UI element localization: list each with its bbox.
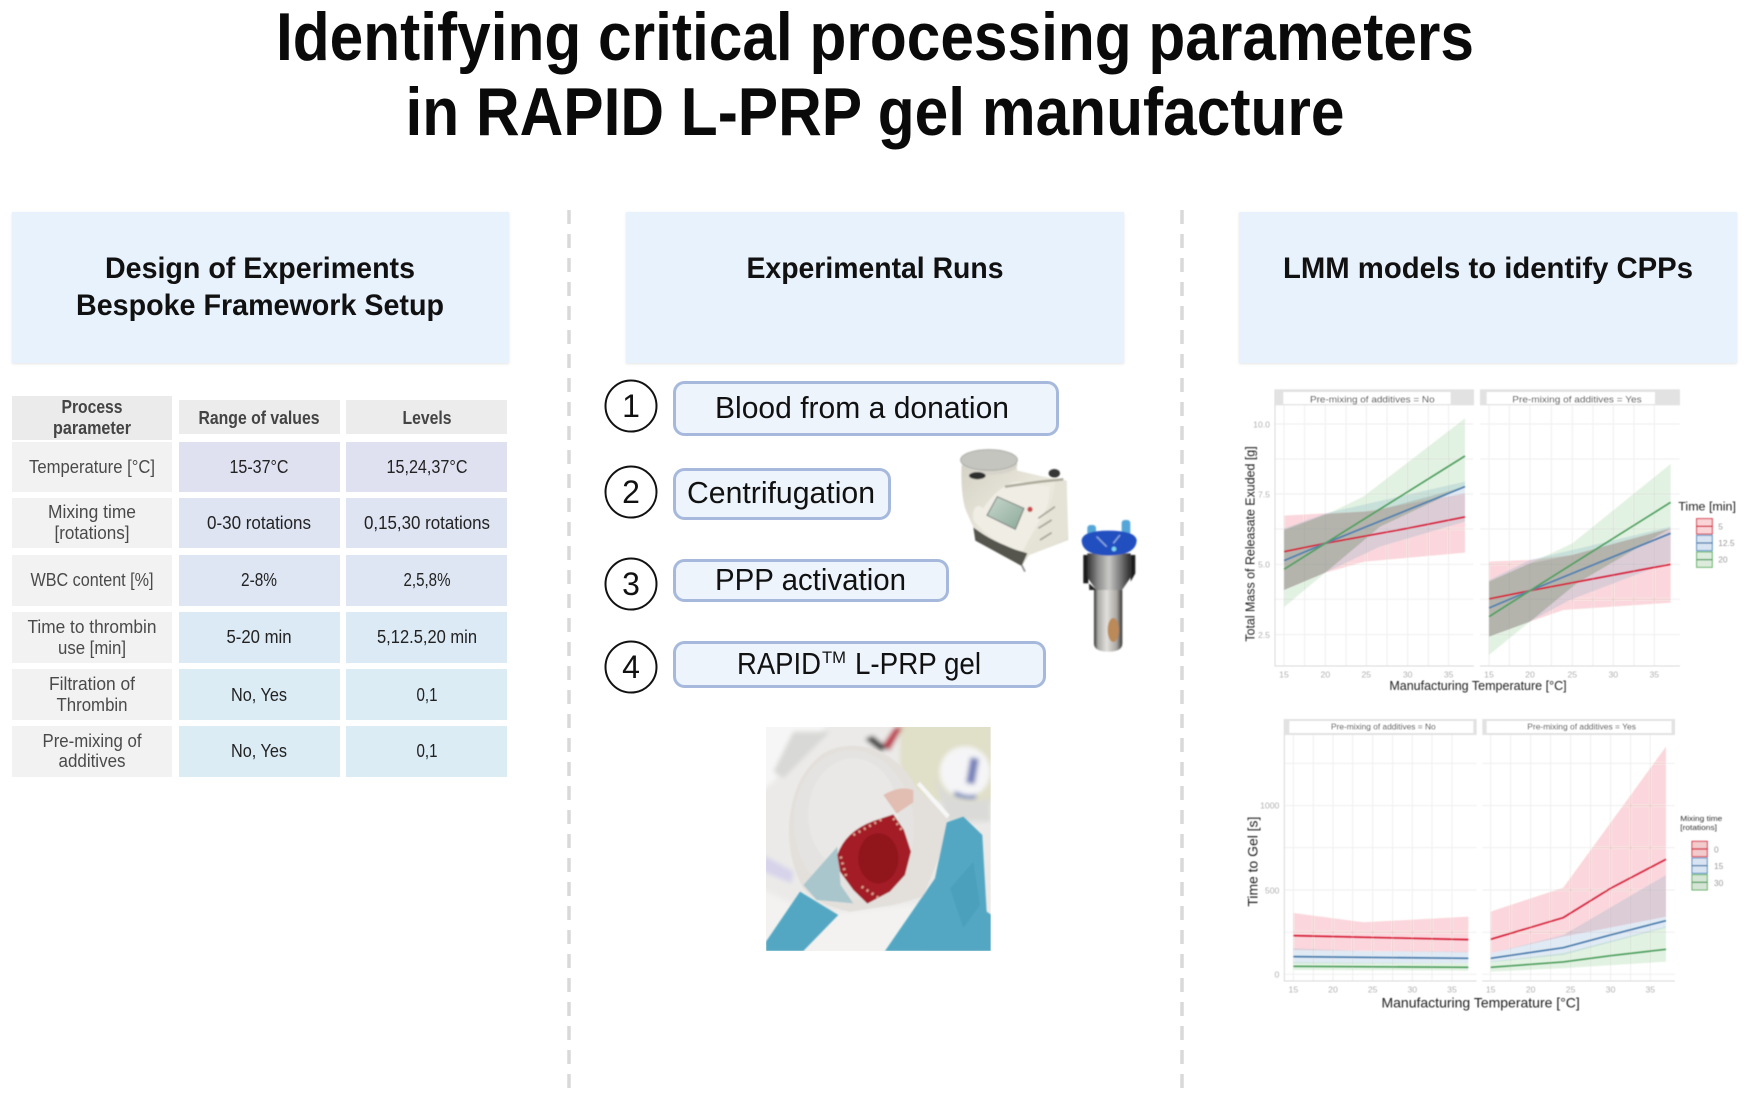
- table: process parameters: Mixing time: [48, 502, 136, 522]
- step 2: Centrifugation: [687, 475, 875, 510]
- table: process parameters: [rotations]: [54, 523, 130, 543]
- table: process parameters: [12, 396, 507, 777]
- table: process parameters: Filtration of: [49, 674, 136, 694]
- chart: total mass of releasate exuded: [1243, 389, 1736, 693]
- title: in RAPID L-PRP gel manufacture: [406, 74, 1344, 150]
- left facet: pre-mixing = No: Pre-mixing of additives = No: [1331, 721, 1436, 731]
- table: process parameters: Thrombin: [56, 695, 128, 715]
- table: process parameters: Time to thrombin: [28, 617, 156, 637]
- table: process parameters: 0,15,30 rotations: [364, 513, 490, 533]
- axis ticks: [1260, 801, 1655, 994]
- axis ticks: 20: [1328, 984, 1338, 994]
- axis ticks: 35: [1649, 670, 1659, 680]
- right facet: pre-mixing = Yes: [1480, 389, 1680, 655]
- table: process parameters: parameter: [53, 418, 131, 438]
- step 1: [606, 380, 1058, 434]
- table: process parameters: Levels: [402, 408, 452, 428]
- table: process parameters: 5-20 min: [226, 627, 292, 647]
- table: process parameters: Range of values: [198, 408, 320, 428]
- step 4: 4: [622, 649, 640, 685]
- icon: filter canister: [1082, 520, 1137, 652]
- axis ticks: 30: [1403, 670, 1413, 680]
- axis ticks: 5.0: [1258, 560, 1270, 570]
- axis titles: Total Mass of Releasate Exuded [g]: [1243, 446, 1257, 642]
- step 3: 3: [622, 566, 640, 602]
- table: process parameters: 2-8%: [241, 570, 277, 590]
- heading box: design of experiments: Design of Experiments: [105, 252, 415, 285]
- axis titles: Time to Gel [s]: [1244, 817, 1260, 907]
- left facet: pre-mixing = No: [1285, 719, 1477, 971]
- step 1: Blood from a donation: [715, 390, 1009, 425]
- axis ticks: 0: [1275, 970, 1280, 980]
- title: [276, 0, 1474, 150]
- axis titles: [1243, 446, 1567, 693]
- axis ticks: 15: [1484, 670, 1494, 680]
- step 4: L-PRP gel: [855, 646, 981, 681]
- table: process parameters: 2,5,8%: [404, 570, 450, 590]
- axis ticks: 35: [1444, 670, 1454, 680]
- legend: mixing time: Mixing time: [1680, 814, 1722, 823]
- table: process parameters: No, Yes: [231, 741, 287, 761]
- axis ticks: 25: [1361, 670, 1371, 680]
- axis ticks: 1000: [1260, 801, 1280, 811]
- axis ticks: 30: [1608, 670, 1618, 680]
- table: process parameters: Pre-mixing of: [42, 731, 142, 751]
- axis ticks: 25: [1566, 984, 1576, 994]
- table: process parameters: Process: [62, 397, 122, 417]
- table: process parameters: 0,1: [416, 685, 438, 705]
- axis ticks: 20: [1321, 670, 1330, 680]
- table: process parameters: 15,24,37°C: [386, 457, 468, 477]
- legend: mixing time: 0: [1714, 844, 1719, 854]
- right facet: pre-mixing = Yes: Pre-mixing of additives = Yes: [1527, 721, 1636, 731]
- step 4: [606, 642, 1044, 692]
- table: process parameters: Temperature [°C]: [29, 457, 155, 477]
- axis ticks: 35: [1645, 984, 1655, 994]
- axis ticks: 10.0: [1253, 419, 1270, 429]
- heading box: experimental runs: [626, 212, 1124, 363]
- chart: time to gel: [1244, 719, 1724, 1011]
- icon: centrifuge device: [961, 450, 1068, 572]
- step 4: RAPID: [737, 646, 821, 681]
- step 1: 1: [622, 388, 640, 424]
- axis ticks: 30: [1407, 984, 1417, 994]
- table: process parameters: use [min]: [58, 638, 126, 658]
- right facet: pre-mixing = Yes: [1482, 719, 1675, 972]
- axis ticks: 35: [1447, 984, 1457, 994]
- title: Identifying critical processing parameters: [276, 0, 1474, 75]
- axis ticks: 25: [1368, 984, 1378, 994]
- axis ticks: 20: [1526, 984, 1536, 994]
- axis titles: [1244, 817, 1580, 1011]
- heading box: LMM models: LMM models to identify CPPs: [1283, 252, 1693, 285]
- axis ticks: 25: [1567, 670, 1577, 680]
- axis ticks: 15: [1486, 984, 1496, 994]
- right facet: pre-mixing = Yes: Pre-mixing of additives = Yes: [1512, 394, 1642, 404]
- step 2: 2: [622, 474, 640, 510]
- axis ticks: 7.5: [1258, 489, 1270, 499]
- axis ticks: 15: [1289, 984, 1298, 994]
- panel: LMM models: [1239, 212, 1737, 1011]
- axis ticks: 30: [1606, 984, 1616, 994]
- step 3: [606, 558, 948, 610]
- legend: time: 12.5: [1718, 538, 1735, 548]
- legend: time: 20: [1718, 555, 1728, 565]
- step 2: [606, 466, 890, 518]
- photo: L-PRP gel in beaker: [760, 722, 997, 958]
- heading box: design of experiments: Bespoke Framework Setup: [76, 289, 444, 322]
- table: process parameters: 15-37°C: [230, 457, 289, 477]
- table: process parameters: additives: [58, 751, 126, 771]
- legend: time: [1678, 500, 1736, 567]
- axis ticks: [1253, 419, 1659, 680]
- table: process parameters: 5,12.5,20 min: [377, 627, 477, 647]
- table: process parameters: 0,1: [416, 741, 438, 761]
- panel: experimental runs: [606, 212, 1137, 958]
- heading box: LMM models: [1239, 212, 1737, 363]
- heading box: design of experiments: [12, 212, 509, 363]
- step 3: PPP activation: [715, 562, 906, 597]
- axis ticks: 2.5: [1258, 630, 1270, 640]
- axis titles: Manufacturing Temperature [°C]: [1389, 679, 1567, 693]
- table: process parameters: WBC content [%]: [30, 570, 154, 590]
- table: process parameters: 0-30 rotations: [207, 513, 311, 533]
- legend: mixing time: 15: [1714, 861, 1724, 871]
- left facet: pre-mixing = No: Pre-mixing of additives = No: [1310, 394, 1435, 404]
- heading box: experimental runs: Experimental Runs: [746, 252, 1004, 285]
- legend: time: Time [min]: [1678, 500, 1736, 514]
- axis ticks: 15: [1279, 670, 1289, 680]
- axis ticks: 500: [1265, 885, 1280, 895]
- step 4: TM: [822, 648, 846, 667]
- legend: mixing time: [rotations]: [1680, 823, 1717, 832]
- legend: mixing time: 30: [1714, 878, 1724, 888]
- table: process parameters: No, Yes: [231, 685, 287, 705]
- panel: design of experiments: [12, 212, 509, 777]
- axis ticks: 20: [1525, 670, 1535, 680]
- left facet: pre-mixing = No: [1276, 389, 1474, 607]
- legend: mixing time: [1680, 814, 1724, 890]
- legend: time: 5: [1718, 521, 1723, 531]
- axis titles: Manufacturing Temperature [°C]: [1381, 995, 1580, 1011]
